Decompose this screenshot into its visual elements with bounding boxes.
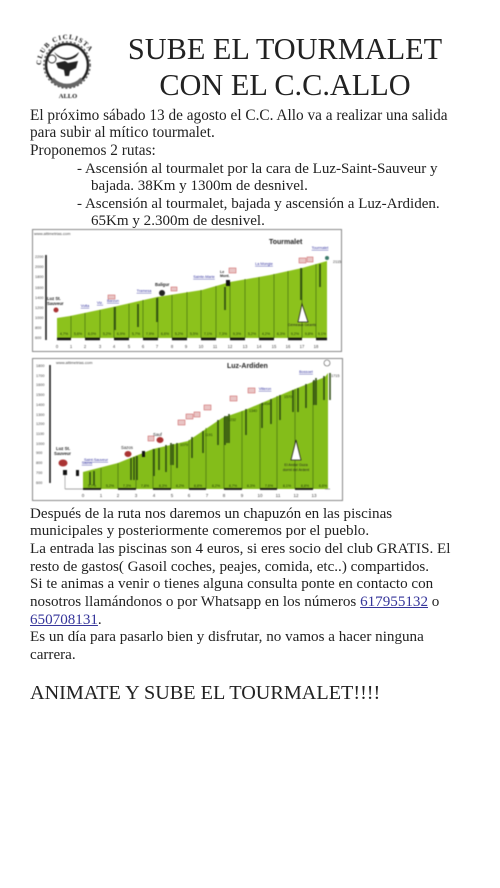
chart: Luz-Ardiden profile: 1340 (249, 409, 257, 413)
chart: Tourmalet profile: 1600 (35, 286, 43, 290)
chart: Tourmalet profile: Mont. (220, 274, 230, 278)
chart: Luz-Ardiden profile: 8,2% (212, 484, 221, 488)
chart: Tourmalet profile: 800 (35, 326, 41, 330)
chart: Luz-Ardiden profile: 1079 (180, 443, 188, 447)
chart: Tourmalet profile: 9,2% (291, 332, 300, 336)
chart: Tourmalet profile: 10 (199, 344, 204, 349)
chart: Tourmalet profile: La Mongie (255, 262, 273, 266)
chart: Tourmalet profile: 7 (156, 344, 159, 349)
chart: Tourmalet profile: Tourmalet (312, 246, 329, 250)
chart: Tourmalet profile: 5,5% (190, 332, 199, 336)
closing call to action: ANIMATE Y SUBE EL TOURMALET!!!! (30, 682, 380, 704)
logo: club ciclista allo (36, 34, 92, 100)
chart: Luz-Ardiden profile: 1700 (36, 374, 44, 378)
chart: Tourmalet profile: 2200 (35, 255, 43, 259)
body text: Después de la ruta nos daremos un chapuzón en las piscinas (30, 506, 392, 522)
chart: Luz-Ardiden profile: 5,2% (106, 484, 115, 488)
chart: Luz-Ardiden profile: 5,7% (88, 484, 97, 488)
chart: Luz-Ardiden profile: 1191 (205, 433, 213, 437)
chart: Tourmalet profile (31, 228, 343, 353)
chart: Luz-Ardiden profile: dorml del Ardent (283, 468, 309, 472)
chart: Tourmalet profile: 14 (257, 344, 262, 349)
chart: Luz-Ardiden profile: 8,8% (194, 484, 203, 488)
chart: Luz-Ardiden profile: Bossoet (299, 370, 314, 374)
chart: Tourmalet profile: Volta (81, 304, 90, 308)
chart: Luz-Ardiden profile: 8 (223, 493, 226, 498)
chart: Luz-Ardiden profile: 1400 (36, 403, 44, 407)
chart: Tourmalet profile: 5,2% (103, 332, 112, 336)
chart: Luz-Ardiden profile: 7,8% (141, 484, 150, 488)
chart: Tourmalet profile: 3 (99, 344, 102, 349)
chart: Tourmalet profile: 18 (314, 344, 319, 349)
chart: Tourmalet profile: Tramesa (137, 289, 152, 293)
chart: Luz-Ardiden profile: 8,2% (176, 484, 185, 488)
chart: Luz-Ardiden profile: Villeron (259, 387, 271, 391)
chart: Luz-Ardiden profile: Luz-Ardiden (227, 363, 268, 370)
chart: Luz-Ardiden profile: 9 (241, 493, 244, 498)
chart: Tourmalet profile: 1 (70, 344, 73, 349)
chart: Luz-Ardiden profile: 7,3% (123, 484, 132, 488)
chart: Luz-Ardiden profile: 8,3% (247, 484, 256, 488)
chart: Luz-Ardiden profile: 700 (36, 471, 42, 475)
chart: Tourmalet profile: 1000 (35, 316, 43, 320)
chart: Tourmalet profile: 5 (128, 344, 131, 349)
chart: Luz-Ardiden profile: 1600 (36, 383, 44, 387)
chart: Tourmalet profile: Sauveur (47, 301, 64, 306)
chart: Tourmalet profile: 15 (272, 344, 277, 349)
intro text: para subir al mítico tourmalet. (30, 124, 215, 141)
chart: Tourmalet profile: 4,7% (60, 332, 69, 336)
chart: Luz-Ardiden profile: 6 (188, 493, 191, 498)
body text: nosotros llamándonos o por Whatsapp en los números 617955132 o (30, 594, 439, 610)
chart: Luz-Ardiden profile: 1 (100, 493, 103, 498)
chart: Luz-Ardiden profile: 800 (36, 461, 42, 465)
route list: bajada. 38Km y 1300m de desnivel. (91, 178, 308, 194)
chart: Tourmalet profile: 1400 (35, 296, 43, 300)
body text: 650708131. (30, 612, 102, 628)
chart: Luz-Ardiden profile: 1570 (284, 395, 292, 399)
chart: Luz-Ardiden profile: 7 (206, 493, 209, 498)
chart: Luz-Ardiden profile: Sauveur (54, 451, 71, 456)
chart: Luz-Ardiden profile: 12 (293, 493, 299, 498)
body text: resto de gastos( Gasoil coches, peajes, comida, etc..) compartidos. (30, 559, 429, 575)
chart: Luz-Ardiden profile: 7,6% (265, 484, 274, 488)
body text: municipales y posteriormente comeremos por el pueblo. (30, 523, 369, 539)
chart: Luz-Ardiden profile: 1500 (36, 393, 44, 397)
chart: Luz-Ardiden profile: 1454 (262, 402, 270, 406)
body text: Si te animas a venir o tienes alguna consulta ponte en contacto con (30, 576, 433, 592)
chart: Tourmalet profile: 1200 (35, 306, 43, 310)
chart: Tourmalet profile: 2 (84, 344, 87, 349)
logo: club ciclista allo: ALLO (59, 93, 77, 100)
chart: Tourmalet profile: Baligur (155, 282, 170, 287)
body text: Es un día para pasarlo bien y disfrutar, no vamos a hacer ninguna (30, 629, 424, 645)
chart: Luz-Ardiden profile: 10 (257, 493, 263, 498)
chart: Luz-Ardiden profile: 6,6% (319, 484, 328, 488)
chart: Luz-Ardiden profile: www.altimetrias.com (56, 360, 93, 365)
route list: 65Km y 2.300m de desnivel. (91, 213, 265, 229)
title: SUBE EL TOURMALET (128, 32, 442, 66)
body text: carrera. (30, 647, 76, 663)
chart: Tourmalet profile: 9 (185, 344, 188, 349)
chart: Tourmalet profile: 7,9% (146, 332, 155, 336)
title: CON EL C.C.ALLO (159, 68, 411, 102)
chart: Tourmalet profile: 9,8% (305, 332, 314, 336)
chart: Tourmalet profile: 8 (171, 344, 174, 349)
chart: Tourmalet profile: Viz. (97, 301, 103, 305)
chart: Luz-Ardiden profile: 3 (135, 493, 138, 498)
logo: club ciclista allo: CLUB CICLISTA (36, 34, 92, 66)
chart: Luz-Ardiden profile: 1715 (331, 374, 339, 378)
chart: Luz-Ardiden profile: 600 (36, 481, 42, 485)
chart: Tourmalet profile: 6,6% (161, 332, 170, 336)
chart: Tourmalet profile: Barzun (107, 299, 119, 303)
chart: Luz-Ardiden profile: Luz St. (56, 446, 70, 451)
intro text: Proponemos 2 rutas: (30, 142, 156, 159)
chart: Luz-Ardiden profile: Saint-Sauveur (84, 458, 109, 462)
route list (77, 161, 440, 229)
chart: Tourmalet profile: 11 (213, 344, 218, 349)
body text: La entrada las piscinas son 4 euros, si eres socio del club GRATIS. El (30, 541, 450, 557)
chart: Luz-Ardiden profile: 2 (117, 493, 120, 498)
chart: Tourmalet profile: 13 (243, 344, 248, 349)
chart: Luz-Ardiden profile: 900 (36, 451, 42, 455)
intro text: El próximo sábado 13 de agosto el C.C. Allo va a realizar una salida (30, 107, 448, 124)
route list: - Ascensión al tourmalet, bajada y ascensión a Luz-Ardiden. (77, 196, 440, 212)
chart: Tourmalet profile: Gémeaux Géants (288, 323, 316, 327)
chart: Luz-Ardiden profile: Sauf (153, 432, 163, 437)
chart: Tourmalet profile: www.altimetrias.com (34, 231, 71, 236)
chart: Tourmalet profile: 5,7% (132, 332, 141, 336)
chart: Tourmalet profile: 7,1% (204, 332, 213, 336)
chart: Tourmalet profile: 6 (142, 344, 145, 349)
chart: Luz-Ardiden profile: 13 (311, 493, 317, 498)
chart: Tourmalet profile: 9,1% (318, 332, 327, 336)
chart: Luz-Ardiden profile: El Andar Guza (284, 463, 308, 467)
chart: Luz-Ardiden profile: 0 (82, 493, 85, 498)
chart: Luz-Ardiden profile: Sazos (82, 461, 92, 465)
chart: Tourmalet profile: 7,3% (219, 332, 228, 336)
chart: Tourmalet profile: 6,3% (277, 332, 286, 336)
chart: Luz-Ardiden profile: 8,7% (229, 484, 238, 488)
chart: Tourmalet profile: 5,2% (175, 332, 184, 336)
chart: Luz-Ardiden profile: 11 (276, 493, 281, 498)
chart: Luz-Ardiden profile: 1000 (36, 442, 44, 446)
chart: Luz-Ardiden profile: 4 (153, 493, 156, 498)
chart: Tourmalet profile: 0 (56, 344, 59, 349)
chart: Tourmalet profile: Luz St. (47, 296, 61, 301)
chart: Tourmalet profile: 5,6% (74, 332, 83, 336)
chart: Luz-Ardiden profile: 1300 (36, 413, 44, 417)
chart: Tourmalet profile: 16 (286, 344, 291, 349)
route list: - Ascensión al tourmalet por la cara de Luz-Saint-Sauveur y (77, 161, 438, 177)
chart: Tourmalet profile: 2000 (35, 265, 43, 269)
chart: Luz-Ardiden profile: 5 (171, 493, 174, 498)
chart: Luz-Ardiden profile: 1232 (228, 418, 236, 422)
chart: Tourmalet profile: 4,2% (262, 332, 271, 336)
chart: Tourmalet profile: Tourmalet (269, 239, 303, 246)
chart: Tourmalet profile: 9,3% (233, 332, 242, 336)
chart: Luz-Ardiden profile: Sazos (121, 445, 133, 450)
chart: Tourmalet profile: 4 (113, 344, 116, 349)
chart: Luz-Ardiden profile: 8,3% (159, 484, 168, 488)
chart: Tourmalet profile: 6,0% (88, 332, 97, 336)
title (128, 32, 442, 102)
chart: Tourmalet profile: 2115 (333, 260, 341, 264)
body text (30, 506, 450, 663)
chart: Luz-Ardiden profile (31, 357, 344, 502)
chart: Tourmalet profile: 12 (228, 344, 233, 349)
chart: Luz-Ardiden profile: 8,8% (301, 484, 310, 488)
chart: Tourmalet profile: 600 (35, 336, 41, 340)
chart: Luz-Ardiden profile: 1100 (36, 432, 44, 436)
chart: Luz-Ardiden profile: 1800 (36, 364, 44, 368)
chart: Tourmalet profile: 1800 (35, 275, 43, 279)
chart: Tourmalet profile: 5,2% (248, 332, 257, 336)
chart: Tourmalet profile: Le (220, 270, 224, 274)
chart: Tourmalet profile: 6,9% (117, 332, 126, 336)
chart: Luz-Ardiden profile: 8,1% (283, 484, 292, 488)
intro text (30, 107, 448, 159)
chart: Tourmalet profile: 17 (300, 344, 305, 349)
chart: Tourmalet profile: Sainte-Marie (193, 275, 215, 279)
chart: Luz-Ardiden profile: 1200 (36, 422, 44, 426)
